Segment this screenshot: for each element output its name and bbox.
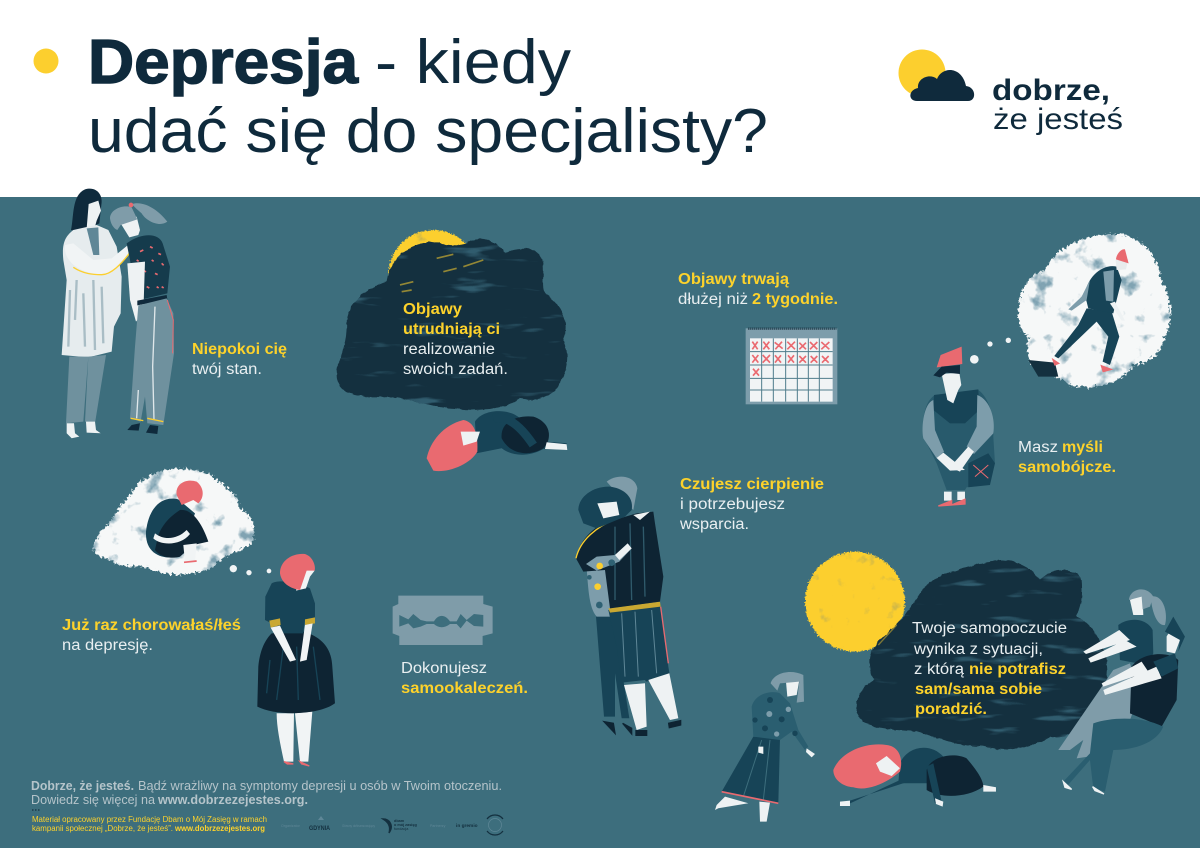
walking woman — [715, 672, 815, 822]
text: Już raz chorowałaś/łeś: Już raz chorowałaś/łeś — [62, 617, 241, 634]
text: Niepokoi cię: Niepokoi cię — [192, 341, 287, 358]
text: Już raz chorowałaś/łeś — [62, 617, 241, 654]
icon: razor blade — [393, 596, 493, 645]
text: Czujesz cierpienie — [679, 476, 824, 533]
partner logos: Główny dofinansowujący — [342, 824, 375, 828]
text: Twoje samopoczucie: poradzić. — [915, 701, 987, 718]
illustration: hugging couple — [576, 477, 681, 735]
icon: calendar — [746, 328, 837, 404]
two pulling figures — [1058, 589, 1185, 794]
lying woman — [833, 744, 996, 807]
text: Objawy trwają: Objawy trwają — [678, 271, 789, 288]
footer credits: Materiał opracowany przez Fundację Dbam o Mój Zasięg w ramach — [32, 815, 267, 824]
text: Masz myśli samobójcze: samobójcze. — [1018, 459, 1116, 476]
logo: dobrze, że jesteś — [898, 50, 1123, 136]
text: Objawy trwają: dłużej niż — [678, 291, 748, 308]
title: Depresja — [88, 28, 359, 97]
logo: dobrze, że jesteś: że jesteś — [993, 103, 1123, 136]
partner logos: in gremio — [456, 823, 478, 829]
title: - kiedy — [375, 28, 571, 97]
footer note: Dobrze, że jesteś. — [31, 778, 134, 793]
footer credits — [32, 810, 267, 833]
text: Twoje samopoczucie: nie potrafisz — [969, 661, 1066, 678]
illustration: girl remembering in thought cloud — [93, 469, 335, 766]
thought dots — [970, 338, 1011, 364]
text: Masz myśli samobójcze — [1018, 439, 1116, 476]
text: Już raz chorowałaś/łeś: na depresję. — [62, 637, 153, 654]
title — [88, 28, 768, 166]
partner logos: Partnerzy — [430, 824, 446, 828]
footer credits: www.dobrzezejestes.org — [174, 824, 265, 833]
standing girl — [257, 554, 335, 766]
text: Twoje samopoczucie: z którą — [914, 661, 964, 678]
footer credits: kampanii społecznej „Dobrze, że jesteś”. — [32, 824, 173, 833]
footer note: Bądź wrażliwy na symptomy depresji u osób w Twoim otoczeniu. — [138, 778, 502, 793]
text: Objawy utrudniają ci: swoich zadań. — [403, 361, 508, 378]
footer note: Dowiedz się więcej na — [31, 792, 156, 807]
thought dots — [230, 565, 271, 575]
footer note — [31, 778, 502, 807]
text: Twoje samopoczucie — [912, 620, 1067, 718]
header band — [0, 0, 1200, 197]
text: Czujesz cierpienie: i potrzebujesz — [680, 496, 785, 513]
text: Masz myśli samobójcze: myśli — [1062, 439, 1103, 456]
text: Objawy utrudniają ci: realizowanie — [403, 341, 495, 358]
thought cloud with walking man — [1018, 234, 1170, 387]
text: Niepokoi cię: twój stan. — [192, 361, 262, 378]
partner logos: dbam — [394, 819, 405, 823]
footer note: www.dobrzezejestes.org. — [157, 792, 308, 807]
partner logos: GDYNIA — [309, 826, 331, 832]
text: Czujesz cierpienie: wsparcia. — [679, 516, 749, 533]
text: Objawy utrudniają ci — [403, 301, 508, 378]
text: Objawy utrudniają ci: Objawy — [403, 301, 462, 318]
illustration: sitting man thinking — [923, 234, 1170, 506]
red crosses — [752, 342, 829, 376]
text: Twoje samopoczucie: wynika z sytuacji, — [913, 641, 1043, 658]
text: Dokonujesz samookaleczeń: samookaleczeń. — [401, 680, 528, 697]
text: Masz myśli samobójcze: Masz — [1018, 439, 1058, 456]
partner logos: fundacja — [394, 827, 409, 831]
text: Twoje samopoczucie: sam/sama sobie — [915, 681, 1042, 698]
white thought cloud — [93, 469, 254, 574]
text: Dokonujesz samookaleczeń: Dokonujesz — [401, 660, 487, 677]
illustration: doctor and patient — [62, 189, 174, 438]
text: Twoje samopoczucie: Twoje samopoczucie — [912, 620, 1067, 637]
text: Niepokoi cię — [192, 341, 287, 378]
text: Dokonujesz samookaleczeń — [401, 660, 528, 697]
text: Objawy utrudniają ci: utrudniają ci — [403, 321, 500, 338]
sleeping figure — [427, 411, 567, 471]
title: udać się do specjalisty? — [88, 97, 768, 166]
illustration: dark cloud with sun and sleeping figure — [337, 230, 567, 471]
text: Objawy trwają: 2 tygodnie. — [752, 291, 838, 308]
illustration: big dark cloud with sun and people — [715, 552, 1185, 822]
partner logos — [281, 815, 503, 835]
partner logos: o mój zasięg — [394, 823, 417, 827]
yellow bullet — [34, 48, 58, 74]
text: Czujesz cierpienie: Czujesz cierpienie — [680, 476, 824, 493]
text: Objawy trwają — [678, 271, 838, 308]
partner logos: Organizator — [281, 824, 301, 828]
logo: dobrze, że jesteś: dobrze, — [992, 74, 1110, 107]
